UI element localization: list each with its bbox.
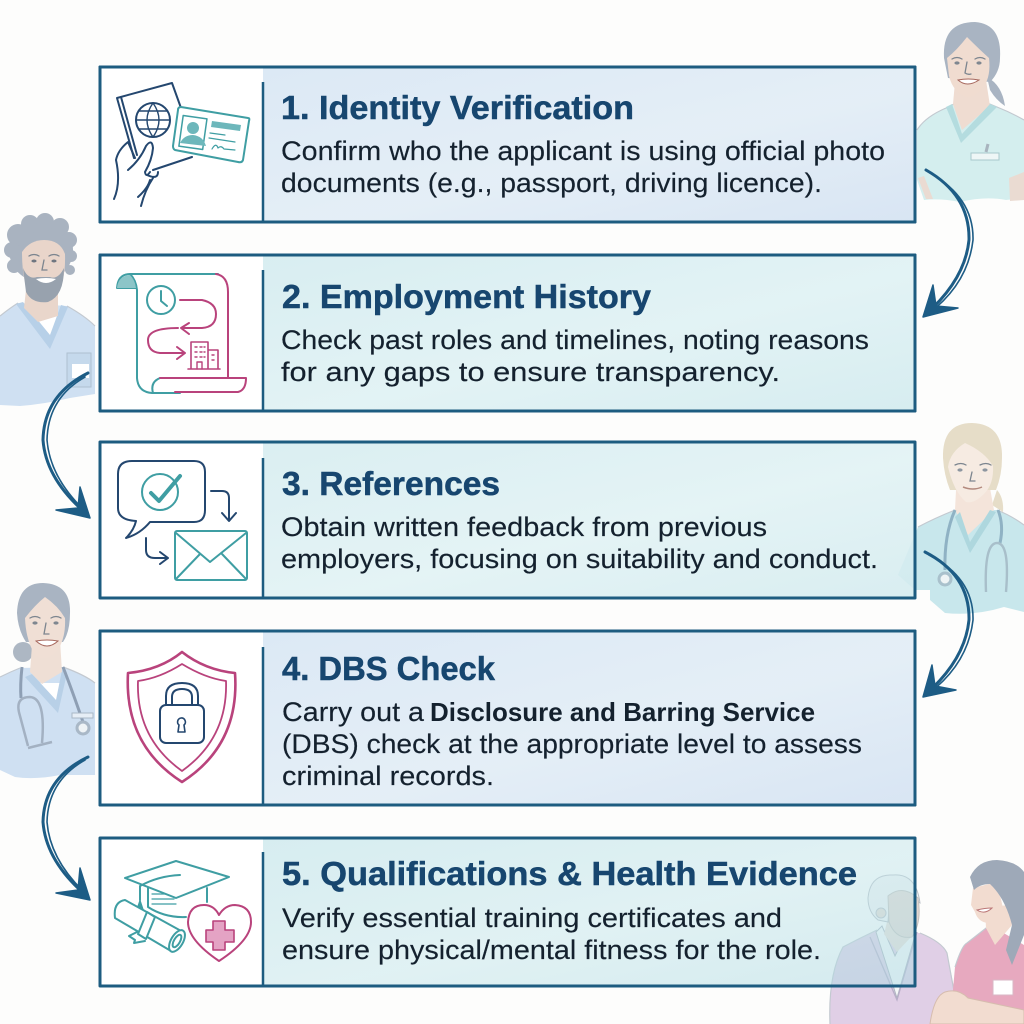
heading: 4. DBS Check <box>282 650 496 687</box>
heading: 5. Qualifications & Health Evidence <box>282 855 857 892</box>
heading: 3. References <box>282 465 500 502</box>
figure: nurse top right <box>917 22 1024 202</box>
text block: for any gaps to ensure transparency. <box>281 357 780 387</box>
icon: passport and id card <box>114 83 249 206</box>
panel: step 3 references <box>100 442 915 598</box>
panel: step 1 identity verification <box>100 67 915 222</box>
text block: Carry out a <box>282 697 425 727</box>
icon: shield with padlock <box>128 652 235 782</box>
panel: step 5 qualifications and health evidence <box>100 838 915 986</box>
icon: graduation cap, diploma and heart <box>115 861 251 961</box>
text block <box>282 903 821 965</box>
text block: Check past roles and timelines, noting reasons <box>281 325 869 355</box>
arrow: step 1 to step 2 <box>923 170 973 317</box>
arrow: step 4 to step 5 <box>43 757 90 900</box>
text block: (DBS) check at the appropriate level to assess <box>282 729 862 759</box>
text block: criminal records. <box>282 761 494 791</box>
text block <box>282 697 862 791</box>
icon: speech bubble and envelope <box>118 461 247 580</box>
heading: 2. Employment History <box>282 278 652 315</box>
heading: 1. Identity Verification <box>281 89 634 126</box>
arrow: step 3 to step 4 <box>923 552 973 697</box>
text block: Obtain written feedback from previous <box>281 512 767 542</box>
figure: doctor left with beard <box>0 213 95 406</box>
panel: step 4 dbs check <box>100 631 915 805</box>
panel: step 2 employment history <box>100 255 915 411</box>
text block: Disclosure and Barring Service <box>430 697 815 727</box>
icon: scroll timeline <box>117 274 246 393</box>
text block: Confirm who the applicant is using official photo <box>281 136 885 166</box>
figure: nurse right with stethoscope <box>898 423 1024 614</box>
text block <box>281 512 878 574</box>
text block: Verify essential training certificates and <box>282 903 782 933</box>
figure: carer with elderly patient <box>830 860 1024 1024</box>
text block: documents (e.g., passport, driving licence). <box>281 168 822 198</box>
text block: employers, focusing on suitability and conduct. <box>281 544 878 574</box>
text block <box>281 325 869 387</box>
figure: nurse left with stethoscope <box>0 583 95 778</box>
arrow: step 2 to step 3 <box>43 373 90 518</box>
text block: ensure physical/mental fitness for the role. <box>282 935 821 965</box>
text block <box>281 136 885 198</box>
